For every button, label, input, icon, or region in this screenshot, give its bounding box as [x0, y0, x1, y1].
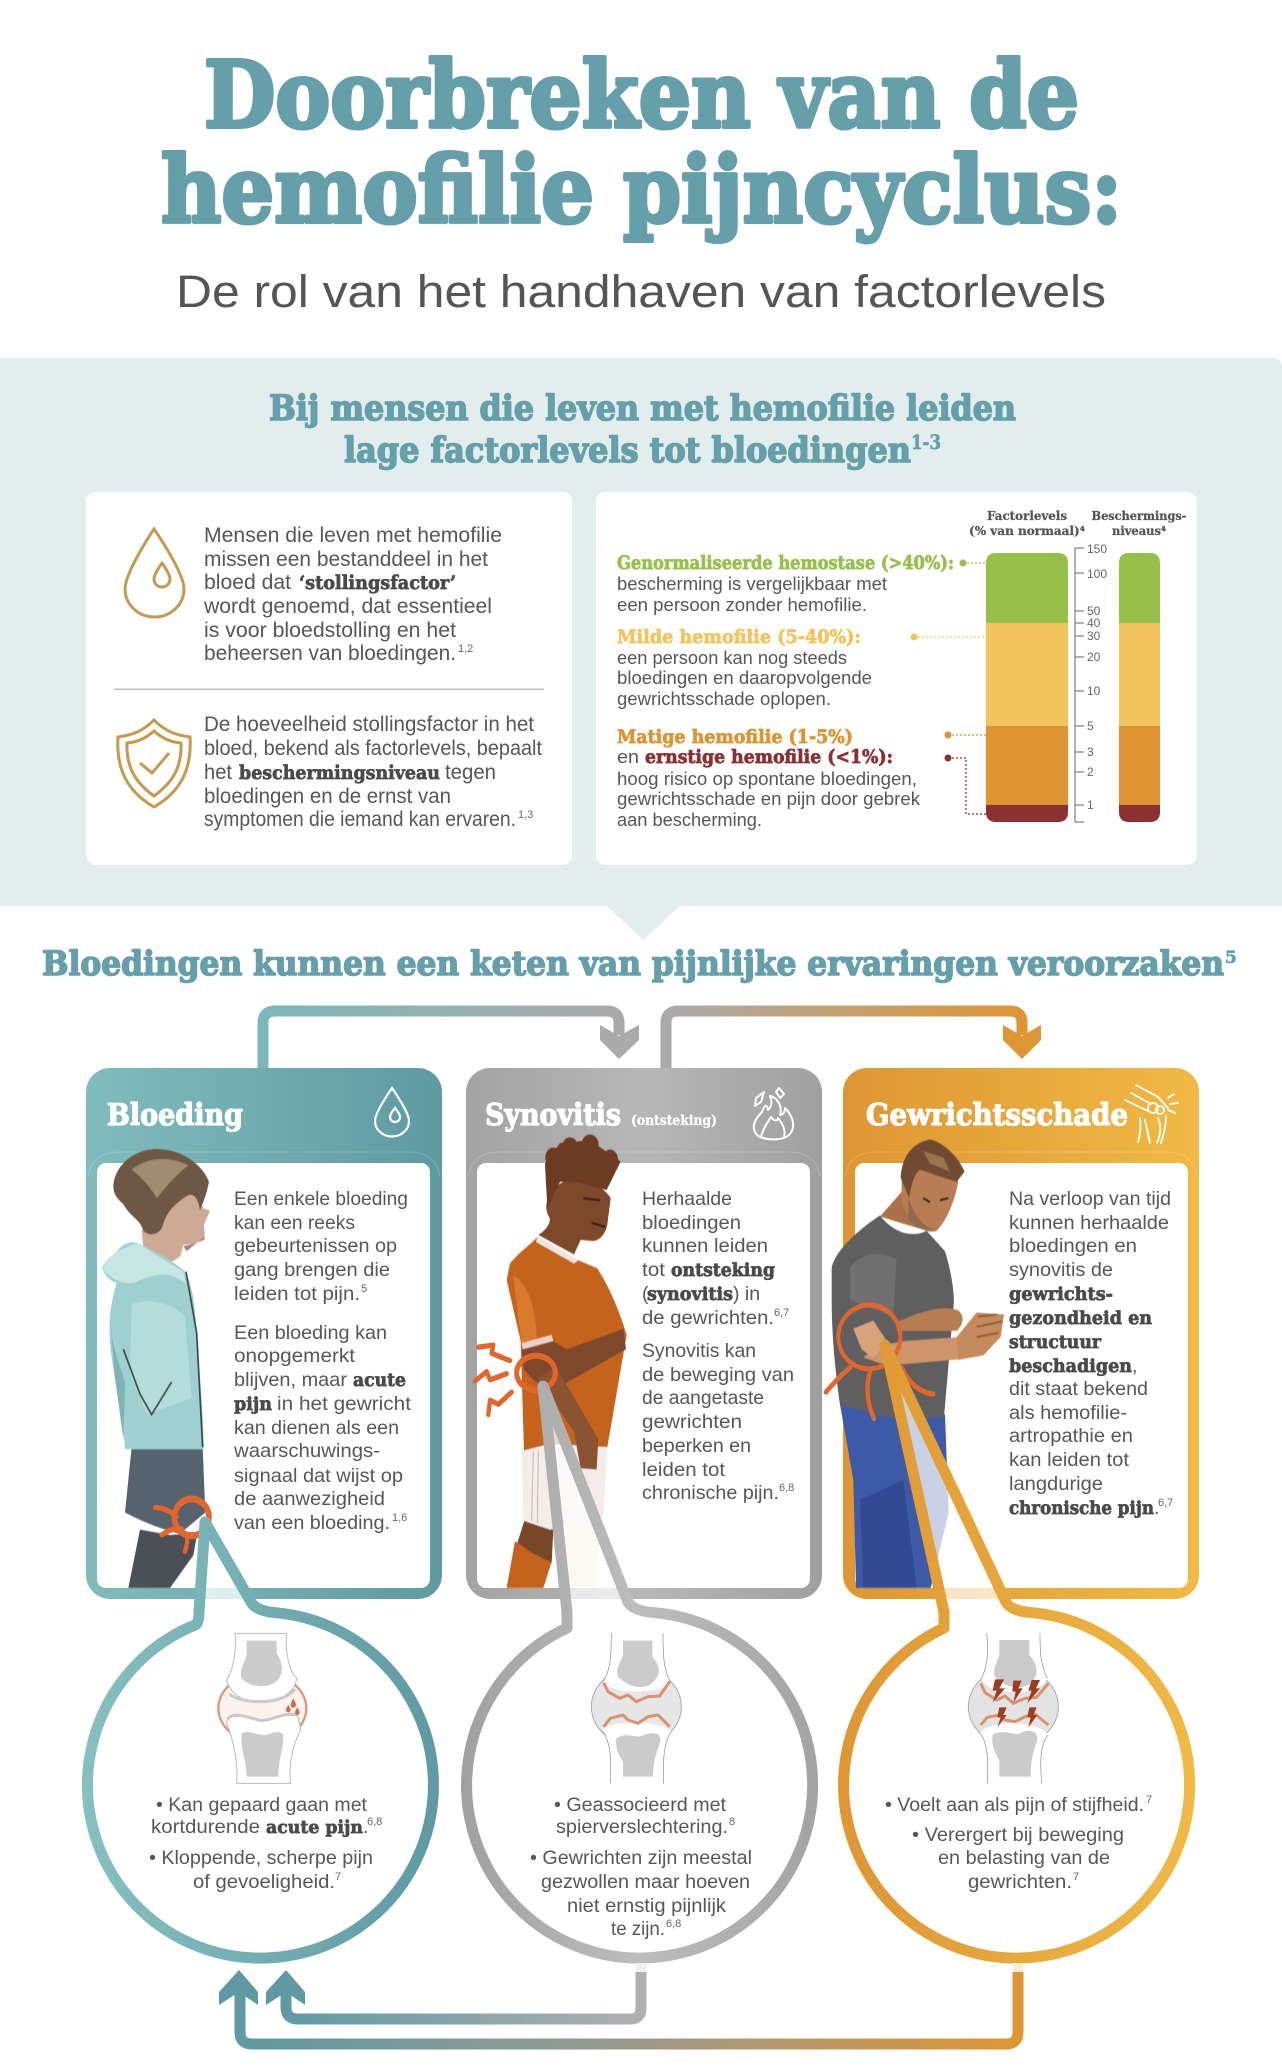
card text: beperken en [642, 1435, 751, 1457]
card text: van een bloeding. [234, 1512, 390, 1534]
title: hemofilie pijncyclus: [161, 136, 1122, 244]
label: mild hemophilia: een persoon kan nog steeds [617, 648, 847, 668]
text: beschermingsniveau: 1,3 [518, 809, 533, 821]
card text: synovitis [647, 1285, 733, 1305]
card text [233, 1188, 412, 1534]
label: moderate and severe hemophilia: gewrichtsschade en pijn door gebrek [617, 789, 921, 809]
axis: 1 [1087, 798, 1094, 812]
bubble text: . [363, 1816, 368, 1838]
axis: 150 [1087, 542, 1107, 556]
label: mild hemophilia: gewrichtsschade oplopen. [617, 689, 831, 709]
bubble text: 6,8 [367, 1816, 382, 1828]
chart column headings: Beschermings- [1092, 509, 1187, 523]
card text: acute [353, 1371, 406, 1391]
card text: synovitis de [1009, 1259, 1113, 1281]
text: stollingsfactor: is voor bloedstolling en het [204, 619, 456, 642]
card text: kunnen leiden [642, 1235, 768, 1257]
card text: chronische pijn [1009, 1499, 1154, 1519]
card text: bloedingen en [1009, 1235, 1137, 1257]
chart column headings: Factorlevels [987, 509, 1067, 523]
axis: 30 [1087, 629, 1101, 643]
panel: low factor levels [0, 358, 1282, 940]
bubble text: • Verergert bij beweging [912, 1824, 1124, 1846]
card text: gewrichten [642, 1411, 742, 1433]
text: stollingsfactor: missen een bestanddeel in het [204, 548, 488, 571]
text: stollingsfactor: Mensen die leven met hemofilie [204, 524, 502, 547]
bubble: acute pain [87, 1522, 433, 1958]
arrow: bleeding to synovitis [263, 1011, 639, 1070]
card text: kunnen herhaalde [1009, 1212, 1169, 1234]
bubble: synovitis symptoms [467, 1386, 813, 1958]
text: beschermingsniveau: bloed, bekend als factorlevels, bepaalt [204, 737, 542, 760]
card text: , [1132, 1355, 1137, 1377]
figure: boy in hoodie [102, 1149, 210, 1588]
card text: Een bloeding kan [234, 1322, 387, 1344]
card text: ) in [733, 1283, 760, 1305]
card text: Herhaalde [642, 1188, 732, 1210]
bubble text: 7 [1073, 1871, 1079, 1883]
card text [642, 1188, 794, 1504]
bar: protection levels [1119, 553, 1160, 822]
label: normal hemostasis: Genormaliseerde hemostase (>40%): [617, 553, 954, 574]
label: mild hemophilia: bloedingen en daaropvolgende [617, 668, 872, 688]
bubble text: of gevoeligheid. [193, 1871, 335, 1893]
card text: als hemofilie- [1009, 1402, 1127, 1424]
card text: gezondheid en [1009, 1309, 1152, 1329]
card text: structuur [1009, 1333, 1102, 1353]
icon: healthy joint with bleed [218, 1633, 306, 1783]
text: stollingsfactor: wordt genoemd, dat essentieel [203, 595, 492, 618]
card text [1009, 1188, 1173, 1519]
card text: Synovitis kan [642, 1340, 756, 1362]
bubble text: 6,8 [666, 1918, 681, 1930]
panel heading: 1-3 [911, 430, 941, 454]
bubble text: spierverslechtering. [556, 1816, 728, 1838]
card text: tot [642, 1259, 666, 1281]
card text: kan dienen als een [234, 1417, 399, 1439]
chart column headings [969, 509, 1187, 538]
text: stollingsfactor: 1,2 [458, 643, 473, 655]
icon: knee joint [1125, 1085, 1178, 1143]
label: moderate and severe hemophilia: ernstige hemofilie (<1%): [645, 747, 893, 768]
card title [485, 1098, 717, 1133]
arrow: synovitis back to bleeding [266, 1963, 646, 2019]
chart column headings: niveaus⁴ [1112, 524, 1166, 538]
axis: 2 [1087, 765, 1094, 779]
card: Bloeding [86, 1068, 442, 1599]
card text: kan leiden tot [1009, 1449, 1130, 1471]
text: beschermingsniveau: het [204, 761, 232, 784]
bubble text: en belasting van de [938, 1847, 1110, 1869]
bubble text [149, 1794, 382, 1893]
axis: 5 [1087, 719, 1094, 733]
card text: gebeurtenissen op [234, 1235, 397, 1257]
text: stollingsfactor: beheersen van bloedingen. [204, 642, 456, 665]
label: normal hemostasis: bescherming is vergelijkbaar met [617, 574, 887, 594]
card title: Synovitis [485, 1098, 621, 1133]
label: moderate and severe hemophilia: en [617, 747, 639, 767]
card text: onopgemerkt [234, 1345, 356, 1367]
axis: 50 [1087, 604, 1101, 618]
card text: beschadigen [1009, 1357, 1132, 1377]
card text: ( [642, 1283, 649, 1305]
text: beschermingsniveau: De hoeveelheid stollingsfactor in het [204, 713, 534, 736]
card text: gewrichts- [1009, 1285, 1113, 1305]
text: beschermingsniveau: symptomen die iemand kan ervaren. [204, 808, 516, 831]
card text: de aangetaste [642, 1387, 764, 1409]
bubble text: 7 [335, 1871, 341, 1883]
card text: . [1154, 1497, 1159, 1519]
bubble text: te zijn. [611, 1918, 665, 1940]
card text: kan een reeks [234, 1212, 355, 1234]
card text: pijn [234, 1395, 272, 1415]
bar: factor levels [986, 553, 1068, 822]
arrow: joint damage back to bleeding [219, 1963, 1024, 2044]
card text: dit staat bekend [1009, 1378, 1148, 1400]
bubble text: • Geassocieerd met [554, 1794, 727, 1816]
panel heading: lage factorlevels tot bloedingen [344, 430, 911, 471]
axis [1075, 542, 1107, 822]
card text: de gewrichten. [642, 1307, 774, 1329]
arrow: synovitis to joint damage [666, 1011, 1041, 1070]
card text: in het gewricht [277, 1393, 412, 1415]
bubble text: acute pijn [266, 1817, 363, 1838]
card text: artropathie en [1009, 1425, 1133, 1447]
label: normal hemostasis: een persoon zonder hemofilie. [617, 595, 867, 615]
card text: 6,7 [1158, 1497, 1173, 1509]
bubble text [530, 1794, 752, 1940]
card: Synovitis [466, 1068, 822, 1599]
white box: explanation [86, 492, 572, 865]
card text: Een enkele bloeding [234, 1188, 408, 1210]
bubble text [885, 1794, 1152, 1893]
bubble text: 8 [729, 1816, 735, 1828]
label: moderate and severe hemophilia: hoog risico op spontane bloedingen, [617, 769, 917, 789]
text: beschermingsniveau: tegen [445, 761, 496, 784]
card text: 5 [361, 1283, 367, 1295]
text: stollingsfactor: ‘stollingsfactor’ [299, 572, 456, 594]
panel heading [269, 388, 1016, 471]
label: moderate and severe hemophilia: Matige hemofilie (1-5%) [617, 727, 853, 748]
label: moderate and severe hemophilia: aan bescherming. [617, 810, 762, 830]
card text: langdurige [1009, 1473, 1103, 1495]
panel heading: Bij mensen die leven met hemofilie leiden [269, 388, 1016, 429]
card: Gewrichtsschade [826, 1068, 1199, 1599]
white box: factor levels chart [596, 492, 1197, 865]
text: stollingsfactor [203, 524, 502, 665]
card text: blijven, maar [234, 1369, 348, 1391]
axis: 3 [1087, 745, 1094, 759]
card text: 1,6 [392, 1512, 407, 1524]
text: beschermingsniveau: bloedingen en de ernst van [204, 785, 451, 808]
icon: damaged joint [968, 1633, 1058, 1783]
text: beschermingsniveau: beschermingsniveau [239, 762, 440, 784]
card text: waarschuwings- [233, 1440, 380, 1462]
icon: drop [375, 1088, 409, 1136]
axis: 20 [1087, 650, 1101, 664]
icon: blood drop [125, 529, 184, 617]
figure: boy with orange shirt [475, 1135, 627, 1588]
chart leaders [910, 560, 986, 814]
text: beschermingsniveau [204, 713, 542, 831]
icon: flame [754, 1088, 793, 1139]
label: normal hemostasis [617, 553, 954, 615]
card title: Bloeding [107, 1098, 243, 1133]
bubble text: gezwollen maar hoeven [541, 1871, 750, 1893]
bubble text: niet ernstig pijnlijk [567, 1895, 726, 1917]
card text: ontsteking [671, 1261, 775, 1281]
bubble text: • Voelt aan als pijn of stijfheid. [885, 1794, 1144, 1816]
title [161, 41, 1122, 244]
bubble text: 7 [1146, 1794, 1152, 1806]
axis: 100 [1087, 567, 1107, 581]
bubble text: kortdurende [151, 1816, 260, 1838]
axis: 40 [1087, 616, 1101, 630]
bubble text: gewrichten. [968, 1871, 1072, 1893]
card text: de aanwezigheid [234, 1488, 385, 1510]
card title: Gewrichtsschade [866, 1098, 1128, 1133]
card text: gang brengen die [234, 1259, 390, 1281]
title: Doorbreken van de [204, 41, 1079, 149]
bubble: joint damage symptoms [844, 1345, 1190, 1958]
card text: leiden tot [642, 1459, 726, 1481]
icon: shield [118, 720, 190, 807]
card text: 6,8 [779, 1482, 794, 1494]
icon: inflamed joint [591, 1633, 681, 1783]
card text: leiden tot pijn. [234, 1283, 360, 1305]
figure: man with grey shirt [826, 1139, 1004, 1588]
bubble text: • Kloppende, scherpe pijn [149, 1847, 373, 1869]
label: mild hemophilia: Milde hemofilie (5-40%): [617, 627, 861, 648]
axis: 10 [1087, 684, 1101, 698]
label: moderate and severe hemophilia [617, 727, 921, 830]
card text: Na verloop van tijd [1009, 1188, 1171, 1210]
bubble text: • Kan gepaard gaan met [156, 1794, 368, 1816]
card text: de beweging van [642, 1364, 794, 1386]
bubble text: • Gewrichten zijn meestal [530, 1847, 752, 1869]
label: mild hemophilia [617, 627, 872, 709]
section heading: chain of experiences: 5 [1225, 948, 1237, 968]
card title: (ontsteking) [631, 1113, 717, 1129]
card text: 6,7 [774, 1307, 789, 1319]
subtitle: De rol van het handhaven van factorlevels [176, 266, 1106, 317]
card text: signaal dat wijst op [234, 1465, 403, 1487]
card text: chronische pijn. [642, 1482, 779, 1504]
text: stollingsfactor: bloed dat [204, 571, 291, 594]
chart column headings: (% van normaal)⁴ [969, 524, 1085, 538]
card text: bloedingen [642, 1212, 741, 1234]
